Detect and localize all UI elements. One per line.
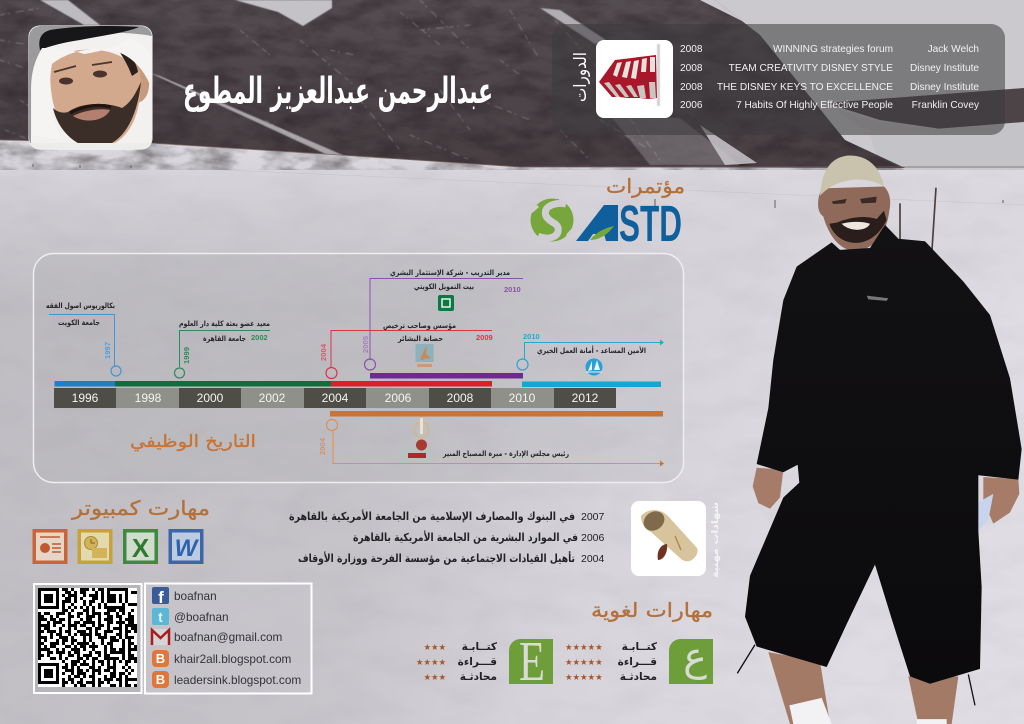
year scale: 1996 [72, 391, 99, 405]
profile photo [28, 26, 152, 151]
entry: nursery founder 2004: مؤسس وصاحب ترخيص [383, 321, 456, 330]
entry: teaching assistant 1999 [174, 319, 270, 378]
Arabic ratings: ★★★★★ [565, 643, 603, 653]
entry: board chairman 2004 [318, 418, 664, 466]
entry: training manager 2005: مدير التدريب - شركة الإستثمار البشري [390, 268, 510, 277]
icon: Word [168, 529, 204, 564]
course list: THE DISNEY KEYS TO EXCELLENCE [717, 82, 893, 93]
contact text: leadersink.blogspot.com [174, 673, 301, 687]
logo: ASTD: STD [619, 195, 682, 252]
Arabic ratings: محادثـة [620, 671, 657, 683]
Arabic ratings [565, 641, 658, 683]
jacket and shorts [745, 225, 1022, 684]
entry: bachelor degree 1997 [46, 301, 121, 376]
heading: conferences: مؤتمرات [606, 174, 685, 198]
course list: Disney Institute [910, 82, 979, 93]
entry: teaching assistant 1999: 1999 [182, 347, 191, 364]
course list: 2008 [680, 63, 703, 74]
icon: Blogger 2 [152, 671, 169, 688]
entry: bachelor degree 1997: بكالوريوس اصول الفقه [46, 301, 115, 310]
background: mountains and sky [0, 0, 1024, 170]
title: name in calligraphy: عبدالرحمن عبدالعزيز المطوع [183, 71, 493, 112]
icon: Outlook [78, 529, 112, 564]
certificates list: في البنوك والمصارف الإسلامية من الجامعة الأمريكية بالقاهرة [289, 509, 575, 523]
contact text: boafnan@gmail.com [174, 630, 283, 644]
icon: Twitter: t [158, 609, 163, 625]
entry: training manager 2005: 2010 [504, 285, 521, 294]
cap [820, 156, 884, 196]
course list: 7 Habits Of Highly Effective People [736, 100, 893, 111]
icon: Excel: X [132, 533, 150, 563]
year scale: 2008 [447, 391, 474, 405]
entry: training manager 2005 [361, 268, 523, 370]
entry: training manager 2005: بيت التمويل الكويتي [414, 282, 474, 291]
Arabic ratings: ★★★★★ [565, 658, 603, 668]
heading: language skills: مهارات لغوية [591, 598, 713, 622]
icon: PowerPoint [32, 529, 68, 564]
entry: nursery founder 2004: حضانة البشائر [397, 334, 443, 343]
course list [680, 44, 980, 111]
entry: assistant secretary 2010: 2010 [523, 332, 540, 341]
panel: contact details [145, 584, 312, 694]
entry: bachelor degree 1997: جامعة الكويت [58, 318, 100, 327]
logo: charity [586, 358, 602, 376]
icon: Facebook [152, 587, 169, 607]
entry: nursery founder 2004: 2009 [476, 333, 493, 342]
heading: professional certificates: شهادات مهنية [710, 502, 721, 578]
certificates list: 2006 [581, 532, 605, 544]
contact text: khair2all.blogspot.com [174, 652, 292, 666]
legs [768, 652, 958, 724]
year scale: 1998 [135, 391, 162, 405]
course list: Disney Institute [910, 63, 979, 74]
icon: Blogger 2: B [156, 672, 165, 687]
course list: Franklin Covey [912, 100, 980, 111]
certificates list [289, 509, 605, 565]
icon: Arabic letter [669, 634, 713, 684]
course list: 2008 [680, 82, 703, 93]
entry: nursery founder 2004: 2004 [319, 343, 328, 361]
entry: board chairman 2004: 2004 [318, 437, 327, 455]
logo: nursery [416, 344, 434, 367]
Arabic ratings: كتــابـة [622, 641, 658, 653]
course list: 2006 [680, 100, 703, 111]
heading: courses: الدورات [571, 52, 591, 102]
course list: TEAM CREATIVITY DISNEY STYLE [729, 63, 893, 74]
icon: Gmail [152, 629, 169, 645]
panel: career timeline [34, 254, 684, 482]
course list: WINNING strategies forum [773, 44, 893, 55]
entry: teaching assistant 1999: معيد عضو بعثة كلية دار العلوم [179, 319, 270, 328]
year scale: 2010 [509, 391, 536, 405]
year scale: 2012 [572, 391, 599, 405]
Arabic ratings: قـــراءة [618, 656, 657, 668]
icons: office apps [32, 529, 204, 564]
year scale: 2002 [259, 391, 286, 405]
language skills: English [416, 631, 553, 693]
entry: assistant secretary 2010: الأمين المساعد - أمانة العمل الخيري [537, 345, 646, 355]
certificates list: 2007 [581, 511, 605, 523]
year scale: 2006 [385, 391, 412, 405]
entry: teaching assistant 1999: 2002 [251, 333, 268, 342]
language skills: Arabic [565, 634, 713, 684]
icon: English letter: E [519, 631, 545, 693]
certificates list: في الموارد البشرية من الجامعة الأمريكية بالقاهرة [353, 530, 578, 544]
fence line in snow [33, 164, 1024, 208]
icon: Twitter [152, 608, 169, 625]
hands [753, 468, 783, 509]
icon: Arabic letter: ع [683, 634, 707, 680]
QR code [34, 584, 142, 693]
contact text: boafnan [174, 589, 217, 603]
icon: Blogger 1 [152, 650, 169, 667]
English ratings [416, 641, 498, 683]
year scale [54, 388, 616, 408]
icon: Blogger 1: B [156, 651, 165, 666]
English ratings: ★★★★ [416, 658, 446, 668]
entry: training manager 2005: 2005 [361, 336, 370, 353]
year scale: 2004 [322, 391, 349, 405]
icon: diploma scroll [631, 501, 706, 576]
logo: Misbah charity [408, 418, 428, 458]
head [818, 187, 890, 251]
icon: Word: W [175, 535, 200, 562]
icon: Facebook: f [158, 588, 164, 607]
panel: courses [552, 24, 1005, 135]
year scale: 2000 [197, 391, 224, 405]
entry: nursery founder 2004 [319, 321, 493, 378]
certificates list: 2004 [581, 553, 605, 565]
English ratings: ★★★ [423, 643, 446, 653]
icon: Excel [123, 529, 158, 564]
entry: bachelor degree 1997: 1997 [103, 342, 112, 359]
contact text: @boafnan [174, 610, 229, 624]
course list: Jack Welch [928, 44, 979, 55]
English ratings: محادثـة [460, 671, 497, 683]
photo: man in black on snow [737, 156, 1022, 724]
icon: red binders [596, 40, 673, 118]
English ratings: ★★★ [423, 673, 446, 683]
heading: computer skills: مهارت كمبيوتر [71, 496, 210, 520]
logo: ASTD [530, 195, 682, 252]
English ratings: كتــابـة [462, 641, 498, 653]
entry: board chairman 2004: رئيس مجلس الإدارة - مبرة المصباح المنير [442, 449, 569, 458]
course list: 2008 [680, 44, 703, 55]
entry: teaching assistant 1999: جامعة القاهرة [203, 334, 246, 343]
logo: Kuwait Finance House [438, 295, 454, 311]
contact text [174, 589, 301, 687]
timeline bars [54, 373, 663, 416]
heading: career history: التاريخ الوظيفي [130, 432, 256, 452]
entry: assistant secretary 2010 [517, 332, 664, 376]
English ratings: قـــراءة [458, 656, 497, 668]
Arabic ratings: ★★★★★ [565, 673, 603, 683]
certificates list: تأهيل القيادات الاجتماعية من مؤسسة الفرحة ووزارة الأوقاف [298, 551, 575, 565]
